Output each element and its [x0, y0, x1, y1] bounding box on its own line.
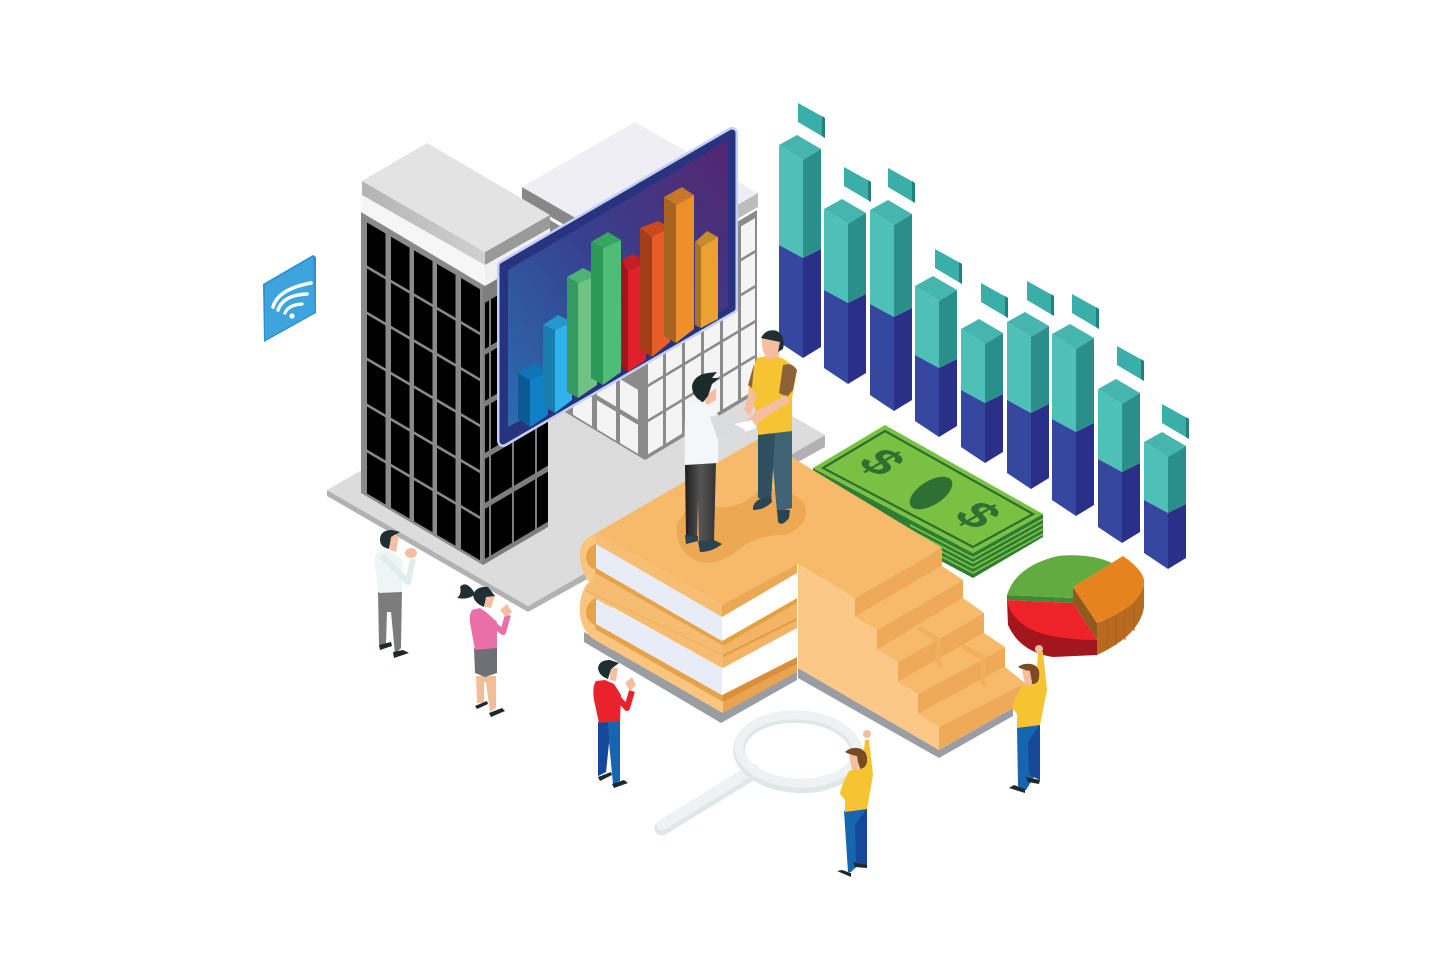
riser 5: [939, 683, 1025, 750]
clapping man in white: [375, 530, 417, 658]
left face windows: [573, 351, 638, 454]
windows left face: [367, 223, 480, 560]
bar 2: [824, 167, 871, 384]
bar 4: [915, 249, 962, 437]
windows right face: [485, 266, 548, 559]
bar 5: [961, 283, 1008, 463]
white band under roof: [361, 194, 485, 286]
parcel tape: [919, 628, 986, 686]
staircase: [798, 548, 1025, 758]
brown sleeves: [779, 364, 797, 397]
green slice side: [1007, 595, 1073, 603]
riser and tread 2: [877, 580, 963, 650]
man in white shirt: [685, 372, 756, 552]
spine backing: [580, 533, 612, 650]
screen bar 3 light green: [567, 268, 597, 398]
shirt: [685, 400, 745, 465]
trousers: [685, 462, 716, 543]
stacked books: [580, 438, 942, 723]
screen bar 7 orange: [664, 187, 694, 343]
upper cover edge: [596, 533, 722, 617]
screen bar 6 orange red: [640, 221, 670, 357]
orange slice outer side: [1097, 584, 1144, 655]
icon: wifi tile: [263, 255, 316, 342]
oval emblem: [904, 470, 958, 516]
riser and tread 1: [855, 548, 942, 617]
lower book crescent and strip: [586, 597, 597, 626]
head: [762, 338, 780, 360]
red slice side: [1007, 600, 1097, 657]
dollar sign left: $: [846, 441, 918, 483]
bar 9: [1144, 404, 1189, 569]
pie chart: [1007, 555, 1144, 657]
lower book pages: [596, 599, 722, 695]
middle cover band: [584, 573, 723, 668]
bar 8: [1098, 346, 1144, 543]
legs: [758, 431, 792, 512]
paper: [734, 420, 756, 433]
right face windows: [648, 218, 755, 454]
cheering man in yellow near pie: [1009, 645, 1047, 793]
man in yellow shirt: [744, 330, 797, 524]
lower book cover: [583, 590, 723, 713]
head: [703, 388, 716, 405]
orange slice: [1073, 556, 1144, 623]
green slice: [1007, 555, 1112, 598]
screen bar 2 cyan: [543, 315, 572, 413]
upper book pages: [596, 544, 722, 641]
side wall: [798, 564, 939, 750]
orange slice inner side: [1073, 587, 1097, 640]
roof: [362, 181, 485, 265]
clapping woman in pink: [457, 584, 512, 717]
bar 1: [779, 103, 825, 358]
bar 7: [1052, 294, 1099, 516]
ground platform: [327, 319, 825, 612]
roof: [522, 187, 645, 272]
chart screen billboard: [503, 133, 732, 441]
bar 3: [870, 168, 915, 411]
shoes: [753, 496, 772, 510]
black glass building: [361, 143, 550, 565]
screen bar 8 amber: [695, 231, 718, 328]
magnifying glass: [662, 712, 859, 828]
grey base: [798, 668, 1013, 758]
stack of dollar bills: [813, 425, 1043, 578]
clapping man in red: [593, 660, 636, 788]
white office building: [522, 122, 758, 460]
cheering man in yellow near magnifier: [837, 730, 873, 877]
top surface: [596, 438, 942, 605]
shirt: [748, 355, 797, 435]
forearm and hand: [745, 395, 790, 427]
dollar sign right: $: [942, 494, 1014, 536]
shoes: [685, 535, 698, 544]
screen bar 5 red: [622, 254, 646, 372]
riser and tread 3: [898, 613, 984, 682]
red slice: [1007, 600, 1097, 640]
screen bar 4 green: [591, 232, 621, 385]
stacked bars row: [779, 103, 1189, 569]
riser and tread 4: [918, 647, 1005, 714]
upper book crescent and strip: [586, 543, 597, 570]
screen bar 1 blue: [518, 363, 548, 427]
shadow under the two men: [677, 489, 806, 563]
grey base: [584, 632, 797, 723]
bar 6: [1007, 281, 1054, 489]
